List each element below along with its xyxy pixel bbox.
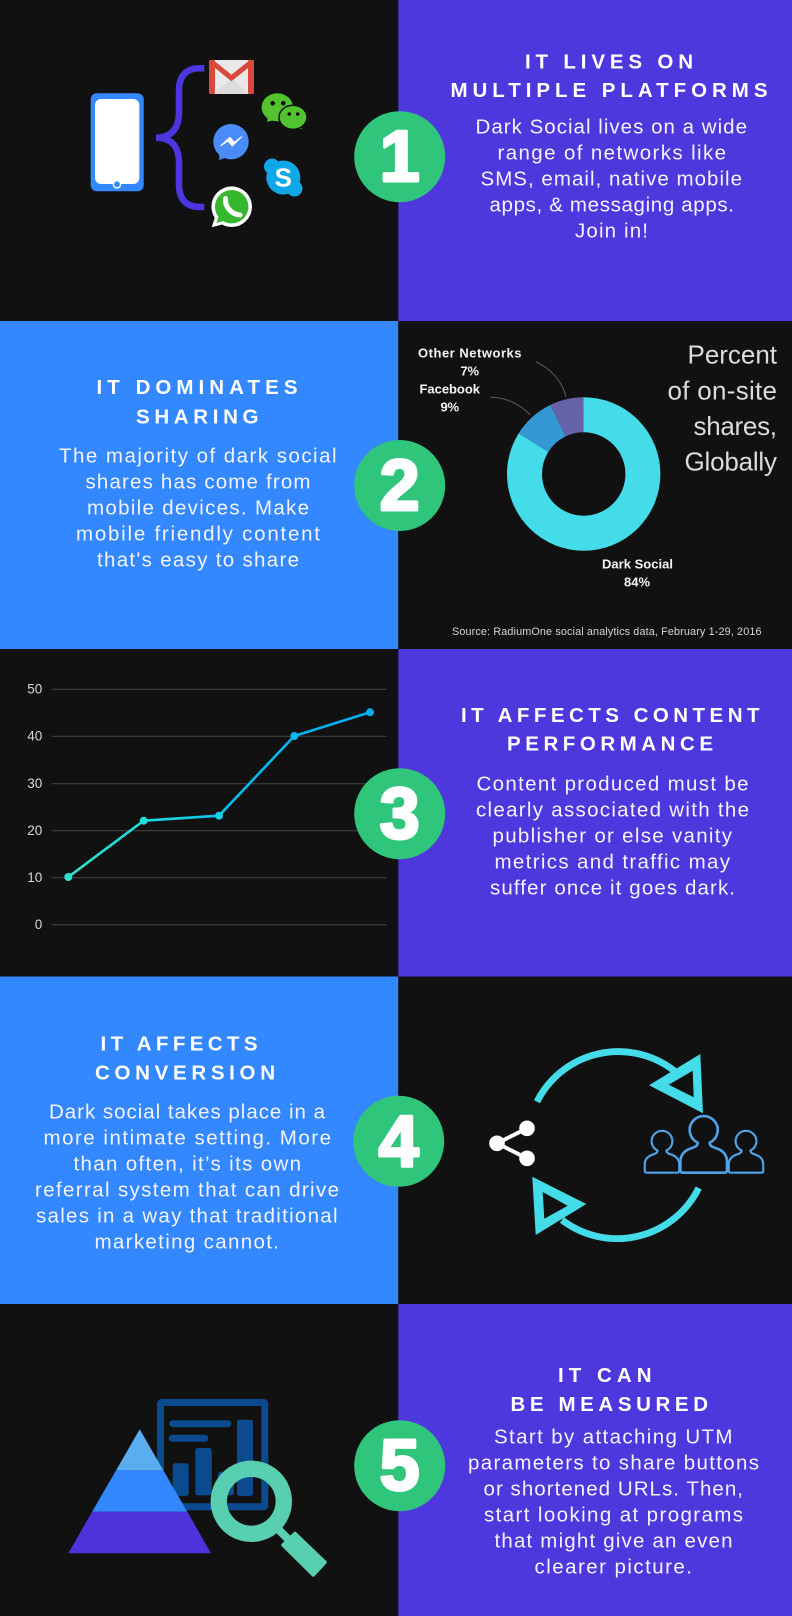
heading: sharing: SHARING (136, 405, 258, 428)
heading: conversion (95, 1033, 275, 1084)
panel: row 3 text (398, 649, 792, 976)
text block: sharing (59, 445, 336, 572)
arrow: lower cycle (532, 1177, 699, 1239)
chart: donut (524, 415, 643, 533)
text block: conversion: than often, it’s its own (74, 1153, 301, 1176)
text block: content performance: publisher or else vanity (492, 825, 733, 848)
chart axis labels: 10 (27, 870, 42, 885)
text block: content performance: metrics and traffic may (494, 851, 731, 874)
text block: platforms: Dark Social lives on a wide (476, 115, 747, 138)
heading: content performance (461, 704, 760, 756)
panel: row 2 donut chart (398, 321, 792, 649)
text block: sharing: The majority of dark social (59, 445, 336, 468)
chart axis labels: 50 (27, 682, 42, 696)
panel: row 1 illustration (0, 0, 398, 321)
chart title: Percent (688, 339, 778, 369)
icon: skype (264, 158, 302, 196)
icon: share (489, 1120, 535, 1166)
label: facebook: 9% (440, 399, 459, 414)
chart axis labels: 0 (35, 917, 42, 932)
text block: conversion: more intimate setting. More (44, 1127, 331, 1150)
badge: 5: 5 (380, 1426, 420, 1506)
text block: measured: start looking at programs (484, 1503, 743, 1526)
text block: conversion: sales in a way that traditional (36, 1205, 338, 1228)
label: dark social: Dark Social (602, 556, 673, 571)
text block: conversion: marketing cannot. (94, 1231, 279, 1254)
text block: content performance: Content produced must be (476, 773, 748, 796)
leader line: facebook (490, 397, 530, 415)
heading: sharing: IT DOMINATES (96, 376, 298, 399)
heading: measured: IT CAN (558, 1364, 652, 1387)
chart: line series (64, 708, 374, 881)
badge: 5 (354, 1420, 445, 1511)
heading: content performance: IT AFFECTS CONTENT (461, 704, 760, 727)
icon: gmail (209, 60, 254, 94)
panel: row 4 text (0, 976, 398, 1304)
text block: platforms (476, 115, 747, 242)
badge: 4: 4 (379, 1102, 419, 1182)
text block: sharing: that's easy to share (97, 549, 299, 572)
badge: 4 (353, 1096, 444, 1187)
heading: measured: BE MEASURED (510, 1393, 708, 1416)
panel: row 5 illustration (0, 1304, 398, 1616)
label: dark social: 84% (624, 574, 650, 589)
heading: content performance: PERFORMANCE (507, 733, 713, 756)
heading: platforms (450, 50, 768, 102)
chart axis labels: 40 (27, 728, 42, 744)
arrow: upper cycle (537, 1052, 703, 1113)
icon: messenger (213, 124, 249, 160)
label: dark social (602, 556, 673, 589)
icon: skype: S (275, 162, 292, 192)
text block: sharing: shares has come from (86, 471, 310, 494)
chart axis labels: 30 (27, 776, 42, 791)
heading: conversion: IT AFFECTS (100, 1033, 258, 1056)
text block: measured: Start by attaching UTM (494, 1425, 732, 1448)
badge: 2 (354, 440, 445, 531)
text block: measured (468, 1425, 759, 1578)
icon: whatsapp (211, 186, 252, 227)
chart title: Globally (684, 447, 777, 477)
panel: row 4 illustration (398, 976, 792, 1304)
text block: sharing: mobile friendly content (76, 523, 320, 546)
label: other networks: Other Networks (418, 345, 522, 360)
text block: sharing: mobile devices. Make (87, 497, 309, 520)
panel: row 1 text (398, 0, 792, 321)
text block: platforms: Join in! (575, 219, 648, 242)
text block: conversion: referral system that can drive (35, 1179, 339, 1202)
text block: measured: that might give an even (494, 1529, 732, 1552)
badge: 3 (354, 768, 445, 859)
panel: row 3 line chart (0, 649, 398, 976)
text block: platforms: range of networks like (498, 141, 726, 164)
badge: 2: 2 (380, 446, 420, 526)
panel: row 2 text (0, 321, 398, 649)
heading: sharing (96, 376, 298, 428)
text block: measured: parameters to share buttons (468, 1451, 759, 1474)
label: other networks: 7% (460, 363, 479, 378)
icon: report (160, 1402, 265, 1507)
badge: 1 (354, 111, 445, 202)
panel: row 5 text (398, 1304, 792, 1616)
icon: wechat (262, 93, 307, 129)
text block: conversion: Dark social takes place in a (49, 1101, 326, 1124)
badge: 1: 1 (380, 117, 420, 197)
chart axis labels: 20 (27, 823, 42, 838)
heading: measured (510, 1364, 708, 1416)
leader line: other networks (536, 362, 566, 397)
badge: 3: 3 (380, 774, 420, 854)
heading: platforms: IT LIVES ON (525, 50, 693, 73)
text block: content performance (476, 773, 749, 900)
icon: phone (91, 93, 144, 191)
chart axis labels (27, 682, 42, 932)
text block: content performance: suffer once it goes dark. (490, 877, 735, 900)
label: facebook (420, 381, 481, 414)
text block: content performance: clearly associated with the (476, 799, 749, 822)
icon: pyramid (68, 1429, 211, 1553)
text block: measured: or shortened URLs. Then, (484, 1477, 743, 1500)
chart title: shares, (694, 411, 777, 441)
icon: magnifier (219, 1469, 325, 1575)
heading: conversion: CONVERSION (95, 1061, 275, 1084)
chart title (668, 339, 778, 477)
icon: curly brace (156, 68, 204, 207)
label: other networks (418, 345, 522, 378)
text block: measured: clearer picture. (534, 1555, 692, 1578)
label: facebook: Facebook (420, 381, 481, 396)
source note: Source: RadiumOne social analytics data, February 1-29, 2016 (452, 626, 762, 638)
chart title: of on-site (668, 375, 777, 405)
text block: platforms: SMS, email, native mobile (480, 167, 742, 190)
text block: platforms: apps, & messaging apps. (490, 193, 734, 216)
text block: conversion (35, 1101, 339, 1254)
icon: audience (645, 1116, 763, 1173)
heading: platforms: MULTIPLE PLATFORMS (450, 79, 768, 102)
